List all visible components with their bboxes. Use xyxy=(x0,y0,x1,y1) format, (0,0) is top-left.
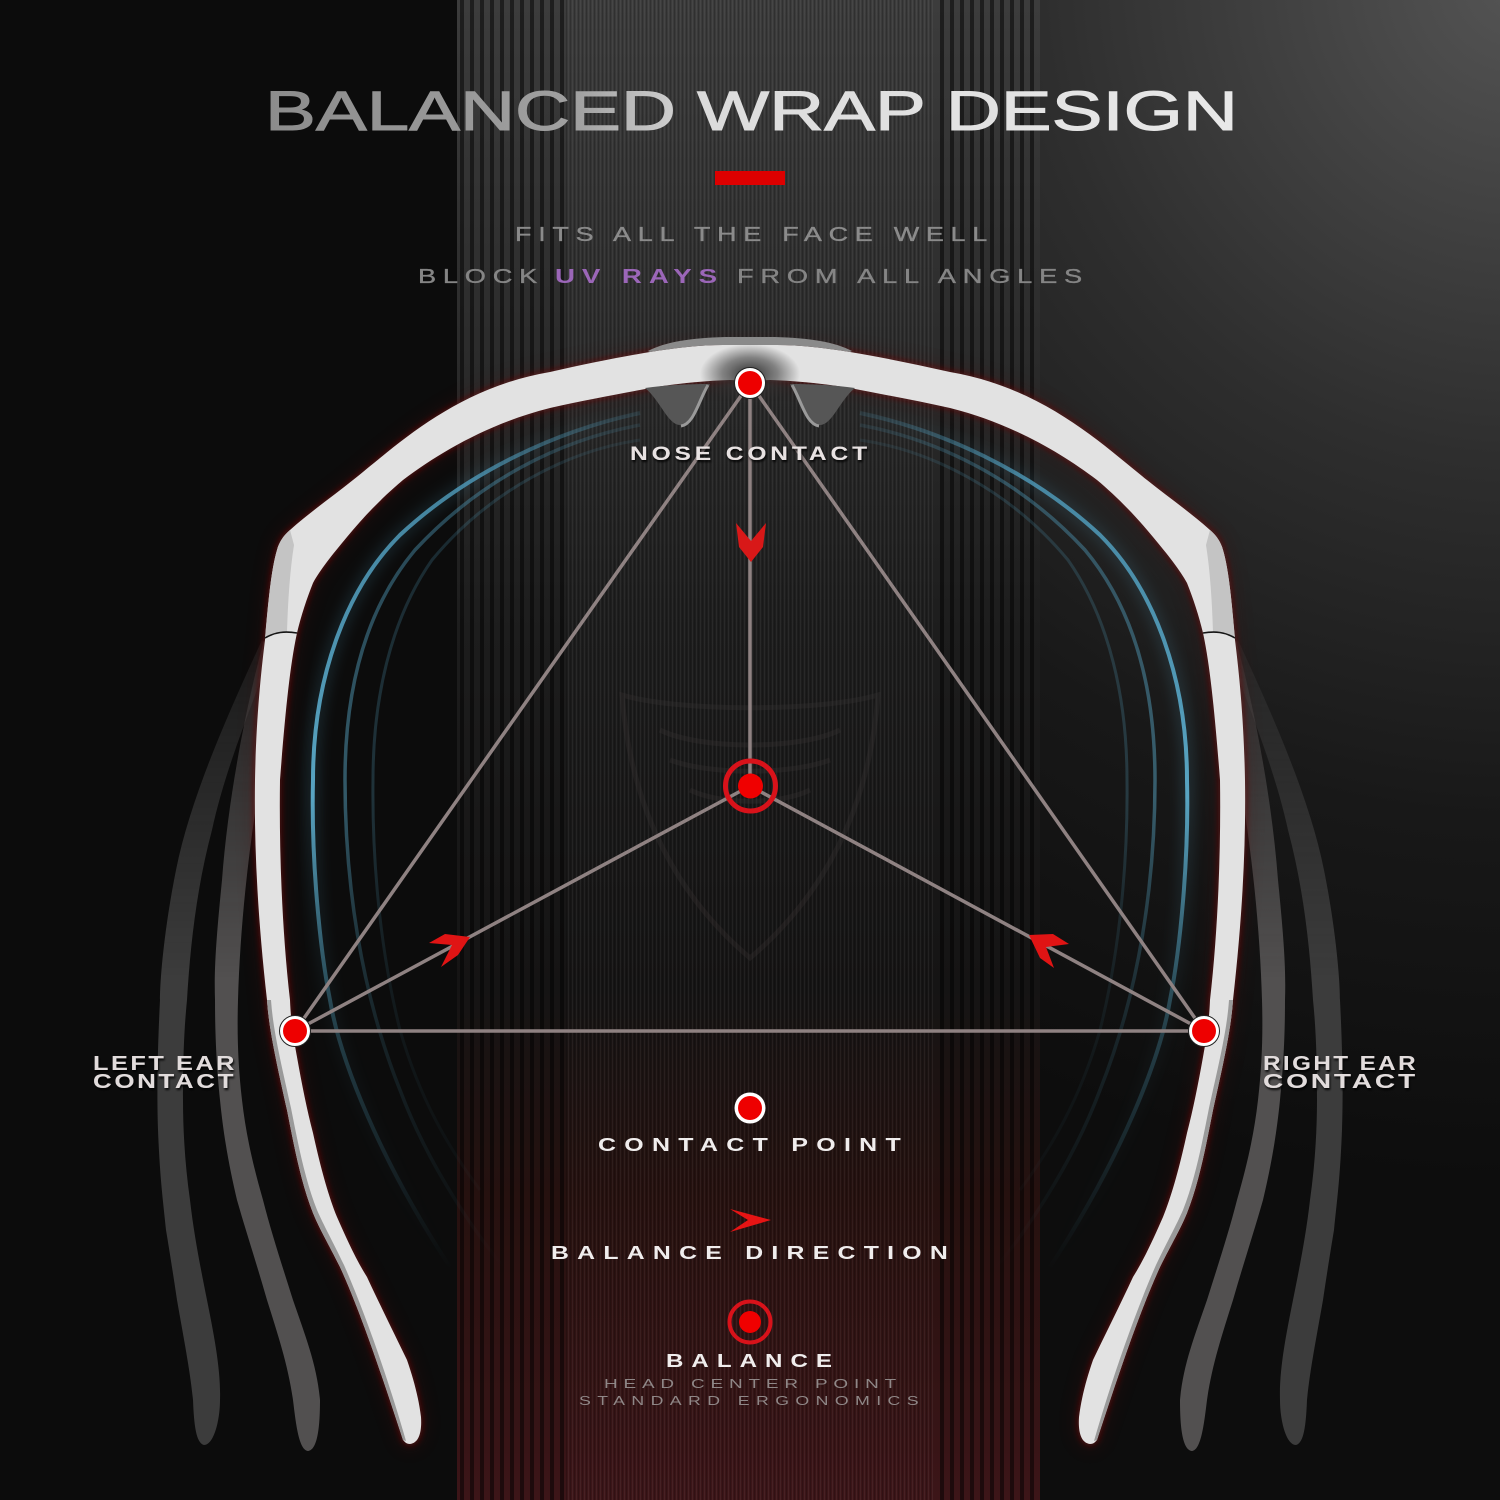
legend: balance xyxy=(579,1302,925,1408)
subtitle line 2: FROM ALL ANGLES xyxy=(737,266,1089,288)
contact point: left ear xyxy=(280,1016,310,1046)
arrow: left ear direction xyxy=(429,934,470,967)
red divider xyxy=(715,171,785,185)
right ghost temples and blue lens lines xyxy=(860,413,1343,1451)
title: BALANCED WRAP DESIGN xyxy=(265,79,1238,142)
label: left ear contact: CONTACT xyxy=(93,1071,236,1093)
panel: right gradient xyxy=(1040,0,1500,1500)
legend label: balance: BALANCE xyxy=(666,1351,840,1371)
label: right ear contact xyxy=(1263,1053,1418,1093)
icon: contact dot xyxy=(734,1092,766,1124)
arrow: nose direction xyxy=(736,523,766,562)
label: nose contact: NOSE CONTACT xyxy=(630,444,871,465)
balance point target xyxy=(726,761,776,811)
label: left ear contact xyxy=(93,1053,237,1093)
legend note: standard ergonomics: STANDARD ERGONOMICS xyxy=(579,1393,925,1408)
nose bridge shadow xyxy=(700,344,800,404)
frame red glow xyxy=(255,345,1245,1444)
sunglasses frame xyxy=(255,337,1245,1444)
subtitle line 2 xyxy=(418,266,1089,288)
label: right ear contact: CONTACT xyxy=(1263,1071,1418,1093)
icon: direction arrow xyxy=(730,1209,771,1232)
label: left ear contact: LEFT EAR xyxy=(93,1053,237,1075)
emblem watermark xyxy=(622,695,878,958)
arrow: right ear direction xyxy=(1029,934,1069,968)
panel: centre stripe column xyxy=(457,0,1040,1500)
left ghost temples and blue lens lines xyxy=(157,413,640,1451)
legend: contact point xyxy=(598,1092,909,1155)
subtitle line 1: FITS ALL THE FACE WELL xyxy=(515,224,994,246)
icon: balance target xyxy=(730,1302,770,1342)
legend: balance direction xyxy=(551,1209,956,1263)
subtitle line 2: UV RAYS xyxy=(555,266,724,288)
subtitle line 2: BLOCK xyxy=(418,266,544,288)
label: right ear contact: RIGHT EAR xyxy=(1263,1053,1418,1075)
legend note: head center point: HEAD CENTER POINT xyxy=(604,1376,902,1391)
contact point: nose xyxy=(734,368,766,398)
legend label: balance direction: BALANCE DIRECTION xyxy=(551,1243,956,1263)
legend label: contact point: CONTACT POINT xyxy=(598,1135,909,1155)
frame wide red haze xyxy=(255,345,1245,1444)
triangle guide lines xyxy=(295,383,1204,1031)
contact point: right ear xyxy=(1188,1016,1220,1046)
